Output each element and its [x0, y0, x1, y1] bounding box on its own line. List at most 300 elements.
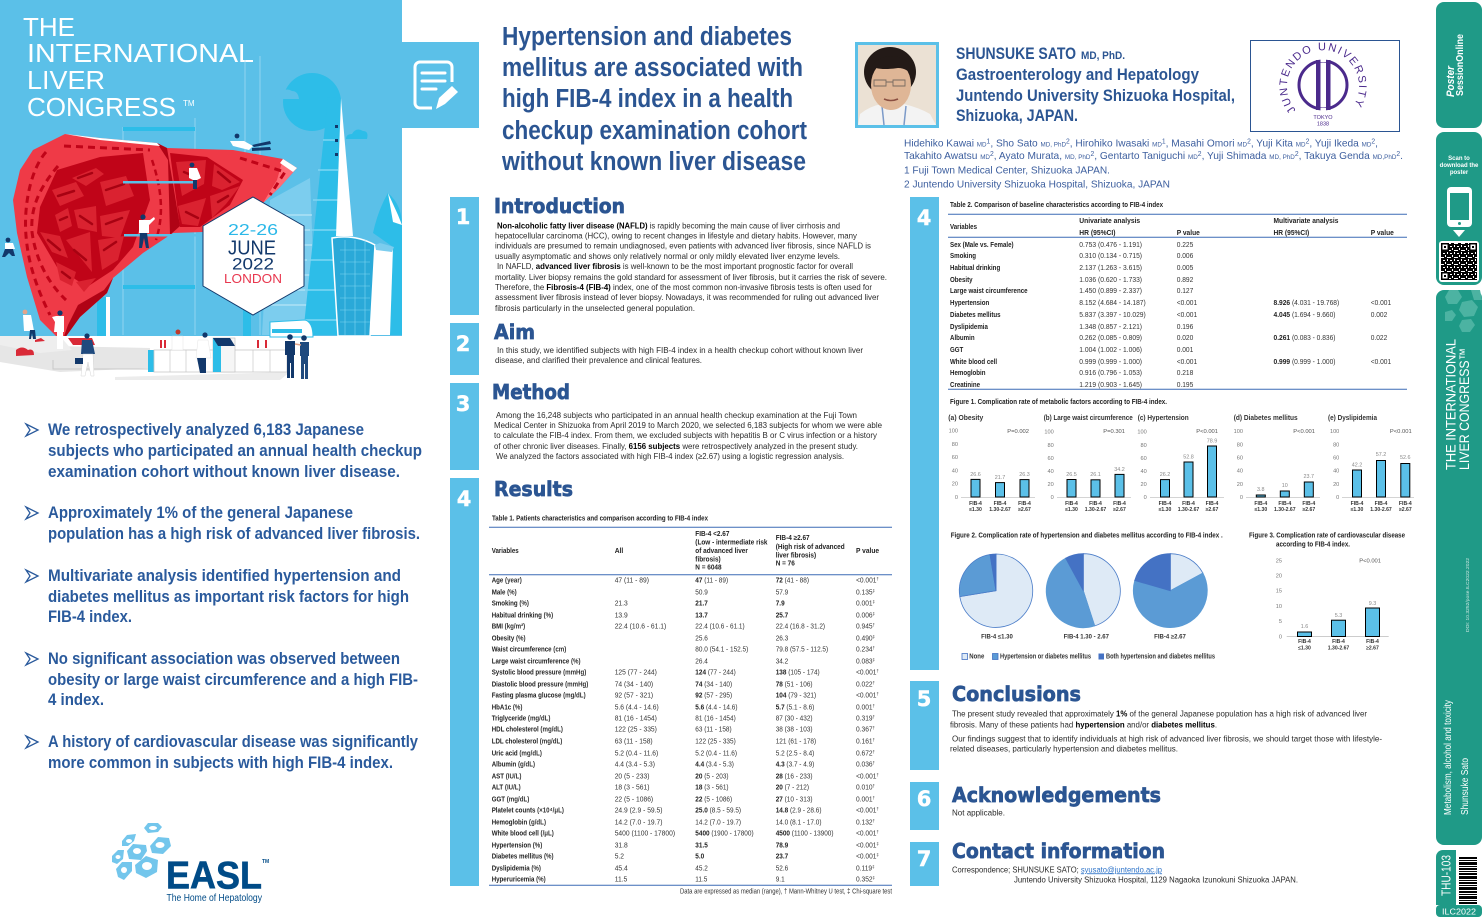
presenter photo — [855, 42, 939, 128]
pie chart: FIB-4 1.30 to 2.67: FIB-4 1.30 - 2.67 — [1064, 634, 1110, 640]
chart: (d) diabetes mellitus: (d) Diabetes mellitus — [1234, 415, 1298, 422]
table 1 column: low to intermediate risk: 25.6 — [695, 635, 708, 642]
chart: (b) large waist circumference: (b) Large waist circumference — [1044, 415, 1133, 422]
table 1 column: high risk: 20 (7 - 212) — [776, 784, 809, 791]
authors and affiliations: MD — [1362, 142, 1372, 148]
two standing scientists — [285, 334, 309, 379]
EASL logo: The Home of Hepatology — [166, 893, 262, 904]
congress title: THE — [23, 12, 75, 42]
table 1 column: variables: Diabetes mellitus (%) — [492, 853, 554, 860]
key point 1: We retrospectively analyzed 6,183 Japanese — [48, 420, 364, 439]
table 1 column: variables: AST (IU/L) — [492, 773, 521, 780]
table 2 column: variables: Hypertension — [950, 300, 989, 307]
table 1 column: low to intermediate risk: 5400 (1900 - 17800) — [695, 830, 754, 837]
key point 4: 4 index. — [48, 690, 104, 709]
lab bench — [53, 338, 287, 372]
table 1 column: all: 45.4 — [615, 865, 628, 872]
panel: conclusions: Conclusions — [952, 682, 1081, 706]
chart: (b) large waist circumference — [1044, 415, 1133, 513]
chart: (d) diabetes mellitus: 10 — [1282, 483, 1288, 489]
table 1 column: high risk: 78 (51 - 106) — [776, 681, 813, 688]
table 1 column: low to intermediate risk: N = 6048 — [695, 564, 722, 572]
table 1 column: variables: Systolic blood pressure (mmHg) — [492, 669, 586, 676]
chart: (a) obesity: P=0.002 — [1007, 429, 1029, 435]
table 1 column: high risk: 27 (10 - 313) — [776, 796, 813, 803]
chart: (e) dyslipidemia: 40 — [1333, 469, 1339, 475]
table 1 column: low to intermediate risk: 45.2 — [695, 865, 708, 872]
key point 2: Approximately 1% of the general Japanese — [48, 503, 353, 522]
chart: (c) hypertension: P<0.001 — [1196, 429, 1218, 435]
chart: (d) diabetes mellitus: 23.7 — [1304, 474, 1314, 480]
table 1 column: high risk: 14.8 (2.9 - 28.6) — [776, 807, 821, 814]
table 1 column: variables: Large waist circumference (%) — [492, 658, 581, 665]
chart: (a) obesity: ≥2.67 — [1018, 507, 1031, 513]
table 1 column: p value: <0.001 — [856, 577, 876, 584]
table 1 column: high risk: 4500 (1100 - 13900) — [776, 830, 834, 837]
authors and affiliations: , Masahi Omori — [1166, 138, 1237, 150]
table 1 column: p value: 0.135 — [856, 589, 873, 596]
chart: (e) dyslipidemia: FIB-4 — [1351, 501, 1364, 507]
table 1 column: p value: 0.319 — [856, 715, 873, 722]
chart: (d) diabetes mellitus: FIB-4 — [1254, 501, 1267, 507]
table 1 column: p value: 0.367 — [856, 726, 873, 734]
chart: (e) dyslipidemia: 80 — [1333, 442, 1339, 448]
table 1 column: all: 5400 (1100 - 17800) — [615, 830, 675, 837]
congress title: CONGRESS — [27, 92, 176, 122]
authors and affiliations: MD, PhD — [1065, 154, 1091, 161]
table 1 column: variables: Hypertension (%) — [492, 842, 542, 849]
table 1 column: variables: GGT (mg/dL) — [492, 796, 529, 803]
table 1 column: p value: 0.945 — [856, 623, 873, 630]
table 1 column: p value: P value — [856, 548, 879, 555]
table 1 column: high risk: 7.9 — [776, 600, 785, 607]
pie chart: FIB-4 up to 1.30: FIB-4 ≤1.30 — [981, 634, 1013, 640]
sidebar: scan to download: download the — [1440, 163, 1479, 169]
chart: (d) diabetes mellitus: 80 — [1237, 442, 1243, 448]
chart: (e) dyslipidemia: ≥2.67 — [1399, 507, 1412, 513]
chart: (c) hypertension: (c) Hypertension — [1138, 415, 1189, 422]
table 1 column: all: 20 (5 - 233) — [615, 773, 649, 780]
panel: introduction: Therefore, the Fibrosis-4 (FIB-4) index, one of the most common non-invasive fibrosis tests is often used for — [495, 282, 872, 292]
authors and affiliations: Takahito Awatsu MD — [904, 150, 990, 162]
key point 4: obesity or large waist circumference and a high FIB- — [48, 670, 418, 689]
chart: (a) obesity: 40 — [952, 468, 958, 474]
key point 3: diabetes mellitus as important risk factors for high — [48, 587, 409, 606]
table 2 column: univariate p value: 0.006 — [1177, 253, 1194, 260]
authors and affiliations: MD — [1152, 142, 1162, 148]
table 1 column: all: 22 (5 - 1086) — [615, 796, 653, 803]
university logo — [1250, 40, 1400, 132]
chart: (c) hypertension: 78.9 — [1207, 438, 1217, 444]
chart: cardiovascular disease: 1.30-2.67 — [1328, 646, 1349, 652]
table 1 title: Table 1. Patients characteristics and comparison according to FIB-4 index — [492, 516, 708, 522]
table 2 column: univariate hazard ratio: 0.310 (0.134 - 0.715) — [1079, 253, 1142, 260]
table 2 column: variables — [950, 224, 1028, 389]
table 2 column: univariate p value: 0.005 — [1177, 265, 1194, 272]
table 1 column: high risk: 26.3 — [776, 635, 788, 642]
barcode — [1459, 857, 1477, 904]
table 2 column: variables: GGT — [950, 347, 963, 354]
chart: (b) large waist circumference: 100 — [1044, 430, 1054, 436]
table 1 column: p value — [856, 548, 879, 883]
table 1 column: variables: Diastolic blood pressure (mmHg) — [492, 681, 588, 688]
chart: (a) obesity: 20 — [952, 482, 958, 488]
table 1 footnote: Data are expressed as median (range), † Mann-Whitney U test, ‡ Chi-square test — [680, 888, 892, 896]
hexagon date badge — [203, 197, 304, 315]
panel: method: 3 — [456, 392, 470, 416]
table 1 column: variables: Habitual drinking (%) — [492, 612, 553, 619]
main title: Hypertension and diabetes — [502, 23, 792, 51]
table 1 column: low to intermediate risk: (Low - intermediate risk — [695, 539, 768, 547]
table 1 column: p value: † — [873, 795, 876, 800]
DOI: DOI: 10.3252/pose.ILC2022.2022 — [1465, 558, 1470, 632]
table 1 column: p value: 0.001 — [856, 600, 873, 607]
table 1 column: high risk: 5.2 (2.5 - 8.4) — [776, 750, 814, 757]
table 1 column: p value: 0.001 — [856, 704, 873, 711]
table 1 column: variables: ALT (IU/L) — [492, 784, 521, 791]
table 1 column: all: 5.2 (0.4 - 11.6) — [615, 750, 658, 757]
authors and affiliations: MD — [1188, 154, 1198, 161]
table 1 column: high risk: 79.8 (57.5 - 112.5) — [776, 646, 828, 653]
table 1 column: p value: † — [876, 668, 879, 673]
chart: (a) obesity: ≤1.30 — [969, 507, 982, 513]
chart: (c) hypertension: 80 — [1140, 443, 1147, 449]
table 1 column: low to intermediate risk: fibrosis) — [695, 556, 721, 564]
authors and affiliations: , Yuji Kita — [1251, 138, 1296, 150]
table 1 column: high risk: 38 (38 - 103) — [776, 726, 813, 734]
table 2 column: univariate hazard ratio: 0.916 (0.796 - 1.053) — [1079, 370, 1142, 377]
table 1 column: low to intermediate risk: 81 (16 - 1454) — [695, 715, 736, 722]
panel: congress banner illustration — [0, 0, 402, 382]
table 2 column: multivariate hazard ratio: 8.926 (4.031 - 19.768) — [1274, 300, 1339, 307]
chart: (b) large waist circumference: FIB-4 — [1113, 501, 1126, 507]
table 2 column: variables: Sex (Male vs. Female) — [950, 242, 1014, 249]
chart: (a) obesity: 0 — [955, 495, 958, 501]
chart: (a) obesity: 1.30-2.67 — [989, 507, 1011, 513]
panel: introduction: fibrosis particularly in the unselected general population. — [495, 303, 695, 313]
chart: (d) diabetes mellitus: ≥2.67 — [1302, 507, 1315, 513]
pie chart: FIB-4 up to 1.30 — [959, 554, 1033, 640]
congress title — [23, 12, 254, 122]
table 1 column: high risk: FIB-4 ≥2.67 — [776, 535, 810, 542]
table 1 column: variables: LDL cholesterol (mg/dL) — [492, 738, 562, 745]
panel: conclusions: related diseases, particularly hypertension and diabetes mellitus. — [950, 743, 1178, 753]
panel: acknowledgements — [910, 782, 1161, 830]
chart: (c) hypertension: FIB-4 — [1206, 501, 1219, 507]
key point 4: No significant association was observed between — [48, 649, 400, 668]
figure 2 title: Figure 2. Complication rate of hypertension and diabetes mellitus according to FIB-4 index . — [951, 532, 1223, 540]
panel: results: Results — [494, 477, 573, 501]
table 1 column: low to intermediate risk: 124 (77 - 244) — [695, 669, 736, 676]
chart: (e) dyslipidemia: 1.30-2.67 — [1370, 507, 1392, 513]
figure on platform — [139, 214, 155, 248]
table 1 column: p value: <0.001 — [856, 692, 876, 699]
panel: introduction: In NAFLD, advanced liver fibrosis is well-known to be the most important prognostic factor for overall — [497, 261, 853, 271]
table 1 column: high risk: 14.0 (8.1 - 17.0) — [776, 819, 821, 826]
table 1 column: p value: 0.001 — [856, 796, 873, 803]
chart: cardiovascular disease: 1.6 — [1301, 624, 1308, 630]
chart: (e) dyslipidemia: 42.2 — [1352, 462, 1362, 468]
table 1 column: all: 122 (25 - 335) — [615, 726, 657, 734]
table 1 column: variables: BMI (kg/m²) — [492, 623, 525, 630]
table 1 column: variables: Fasting plasma glucose (mg/dL) — [492, 692, 586, 699]
chart: (d) diabetes mellitus: ≤1.30 — [1254, 507, 1267, 513]
table 1 column: p value: 0.234 — [856, 646, 873, 653]
table 1 column: p value: † — [873, 749, 876, 754]
panel: contact information: Contact information — [952, 839, 1165, 863]
table 1 column: high risk: 34.2 — [776, 658, 788, 665]
university logo: TOKYO — [1313, 115, 1333, 121]
figure on right lobe — [189, 163, 201, 189]
table 1 column: all: 24.9 (2.9 - 59.5) — [615, 807, 663, 814]
panel: method — [450, 380, 882, 470]
panel: method: Medical Center in Shizuoka from April 2019 to March 2020, we selected 6,183 subjects for whom we were able — [494, 420, 882, 430]
panel: results continued — [910, 197, 1414, 670]
chart: (d) diabetes mellitus: 60 — [1237, 456, 1243, 462]
table 2 column: variables: Smoking — [950, 253, 976, 260]
chart: (d) diabetes mellitus: FIB-4 — [1302, 501, 1315, 507]
table 1 column: p value: † — [873, 783, 876, 788]
table 2 column: univariate p value: 0.195 — [1177, 382, 1194, 389]
table 1 column: low to intermediate risk: 122 (25 - 335) — [695, 738, 736, 745]
panel: aim: Aim — [494, 320, 535, 344]
table 2 column: univariate p value: <0.001 — [1177, 312, 1197, 319]
chart: (e) dyslipidemia: ≤1.30 — [1351, 507, 1364, 513]
liver — [13, 134, 297, 342]
table 1 column: p value: 0.083 — [856, 658, 873, 665]
key point 4 — [26, 649, 418, 709]
chart: (c) hypertension — [1137, 415, 1224, 513]
chart: cardiovascular disease: 0 — [1279, 634, 1282, 640]
chart: (a) obesity: (a) Obesity — [948, 415, 983, 422]
table 1 column: p value: ‡ — [873, 588, 876, 593]
table 1 column: low to intermediate risk: 14.2 (7.0 - 19.7) — [695, 819, 741, 826]
chart: (a) obesity: 26.3 — [1019, 472, 1030, 478]
table 2 column: univariate hazard ratio — [1079, 218, 1146, 389]
pie chart: FIB-4 at least 2.67 — [1133, 554, 1207, 640]
table 1 column: all: 18 (3 - 561) — [615, 784, 649, 791]
authors and affiliations: 2 — [1066, 138, 1070, 146]
EASL logo: EASL — [166, 854, 262, 898]
author name: Shunsuke Sato — [1460, 758, 1471, 815]
table 2 column: multivariate p value: P value — [1371, 230, 1394, 237]
chart: (d) diabetes mellitus — [1234, 415, 1320, 513]
chart: (b) large waist circumference: 0 — [1051, 495, 1054, 501]
presenter details — [956, 45, 1235, 125]
table 1 column: all: 63 (11 - 158) — [615, 738, 653, 745]
key point 3: FIB-4 index. — [48, 607, 132, 626]
table 1 column: variables: Hyperuricemia (%) — [492, 876, 546, 883]
EASL logo: TM — [262, 859, 269, 865]
table 1 column: p value: 0.672 — [856, 750, 873, 757]
chart: (c) hypertension: 60 — [1140, 456, 1147, 462]
table 1 — [489, 527, 892, 885]
table 2 column: univariate hazard ratio: 1.348 (0.857 - 2.121) — [1079, 324, 1142, 331]
table 2 column: variables: Hemoglobin — [950, 370, 986, 377]
table 1 column: high risk: 57.9 — [776, 589, 788, 596]
chart: (c) hypertension: 20 — [1140, 482, 1147, 488]
table 1 column: all: 11.5 — [615, 876, 627, 883]
chart: (e) dyslipidemia: (e) Dyslipidemia — [1328, 415, 1377, 422]
chart: (d) diabetes mellitus: FIB-4 — [1278, 501, 1291, 507]
chart: cardiovascular disease: 25 — [1276, 558, 1282, 564]
main title: checkup examination cohort — [502, 117, 807, 145]
table 1 column: variables: Dyslipidemia (%) — [492, 865, 541, 872]
hexagon date badge: 2022 — [232, 254, 274, 274]
table 1 column: low to intermediate risk: 20 (5 - 203) — [695, 773, 729, 780]
chart: (b) large waist circumference: 26.5 — [1066, 472, 1077, 478]
table 1 column: p value: <0.001 — [856, 830, 876, 837]
chart: cardiovascular disease: 10 — [1276, 604, 1282, 610]
chart: cardiovascular disease — [1276, 558, 1389, 652]
panel: conclusions — [910, 681, 1382, 770]
panel: results — [450, 477, 892, 896]
table 1 column: low to intermediate risk: 92 (57 - 295) — [695, 692, 732, 699]
chart: (b) large waist circumference: FIB-4 — [1065, 501, 1078, 507]
chart: cardiovascular disease: 5.3 — [1335, 613, 1342, 619]
table 1 column: all — [615, 548, 675, 883]
panel: contact information — [910, 839, 1298, 886]
chart: (c) hypertension: 26.2 — [1160, 472, 1170, 478]
table 1 column: p value: 0.036 — [856, 761, 873, 768]
congress title: LIVER — [27, 65, 105, 95]
table 1 column: all: 31.8 — [615, 842, 628, 849]
table 1 column: p value: <0.001 — [856, 853, 876, 860]
table 1 column: p value: 0.010 — [856, 784, 873, 791]
panel: acknowledgements: 6 — [917, 787, 931, 811]
key point 3: Multivariate analysis identified hypertension and — [48, 566, 401, 585]
table 1 column: variables: Male (%) — [492, 589, 517, 596]
table 1 column: low to intermediate risk: 74 (34 - 140) — [695, 681, 732, 688]
table 1 column: high risk: 52.6 — [776, 865, 788, 872]
chart: (a) obesity: 21.7 — [995, 475, 1005, 481]
table 1 column: all: 21.3 — [615, 600, 628, 607]
skyline buildings — [262, 97, 402, 336]
panel: aim — [450, 320, 863, 375]
authors and affiliations: 1 — [987, 138, 990, 146]
table 1 column: high risk — [776, 535, 845, 883]
table 2 column: variables: Albumin — [950, 335, 975, 342]
chart: (a) obesity: FIB-4 — [969, 501, 982, 507]
bus — [270, 320, 313, 337]
authors and affiliations: 2 — [1090, 151, 1094, 158]
scientists — [2, 134, 309, 379]
congress name vertical: LIVER CONGRESS™ — [1456, 348, 1472, 470]
table 2 column: univariate hazard ratio: 0.262 (0.085 - 0.809) — [1079, 335, 1142, 342]
table 1 column: variables: HDL cholesterol (mg/dL) — [492, 726, 563, 734]
table 1 column: p value: 0.490 — [856, 635, 873, 642]
table 1 column: p value: ‡ — [873, 599, 876, 604]
panel: method: of other chronic liver diseases. Finally, 6156 subjects were retrospectively analyzed in the present study. — [494, 441, 858, 451]
table 2 column: univariate p value: 0.218 — [1177, 370, 1194, 377]
authors and affiliations: . — [1400, 150, 1403, 162]
panel: aim: 2 — [456, 332, 470, 356]
authors and affiliations: MD — [1296, 142, 1306, 148]
table 2 column: univariate p value: 0.127 — [1177, 288, 1194, 295]
hexagon date badge: 22-26 — [228, 222, 278, 239]
table 1 column: p value: 0.022 — [856, 681, 873, 688]
chart: (a) obesity: 80 — [952, 442, 958, 448]
table 1 column: high risk: 28 (16 - 233) — [776, 773, 813, 780]
panel: contact information: Correspondence; SHUNSUKE SATO; syusato@juntendo.ac.jp — [952, 864, 1162, 874]
table 1 column: all: All — [615, 548, 623, 555]
table 2 column: univariate p value — [1177, 230, 1200, 389]
table 1 column: low to intermediate risk: FIB-4 <2.67 — [695, 531, 730, 538]
sidebar: poster session online: SessionOnline — [1455, 34, 1466, 96]
table 1 column: low to intermediate risk: 5.0 — [695, 853, 704, 860]
table 1 column: p value: ‡ — [873, 875, 876, 880]
university logo: JUNTENDO UNIVERSITY — [1279, 42, 1367, 113]
table 1 column: variables: Obesity (%) — [492, 635, 526, 642]
platforms — [123, 181, 197, 236]
table 1 column: variables: Waist circumference (cm) — [492, 646, 566, 653]
table 1 column: p value: ‡ — [873, 611, 876, 616]
authors and affiliations: MD — [1237, 142, 1247, 148]
table 2 column: multivariate hazard ratio: 0.999 (0.999 - 1.000) — [1274, 359, 1336, 366]
table 2 column: univariate hazard ratio: 1.004 (1.002 - 1.006) — [1079, 347, 1142, 354]
chart: (a) obesity: 26.6 — [970, 472, 981, 478]
sidebar: poster session online: Poster — [1445, 65, 1457, 97]
table 1 column: all: 13.9 — [615, 612, 628, 619]
walker — [75, 333, 95, 376]
figure 1 title: Figure 1. Complication rate of metabolic factors according to FIB-4 index. — [950, 399, 1167, 406]
figure lying on liver — [230, 134, 271, 151]
sidebar: poster session online — [1436, 2, 1482, 128]
chart: (b) large waist circumference: 26.1 — [1090, 472, 1101, 478]
table 1 column: p value: 0.161 — [856, 738, 873, 745]
authors and affiliations: 1 Fuji Town Medical Center, Shizuoka JAPAN. — [904, 164, 1110, 176]
table 1 column: low to intermediate risk: 80.0 (54.1 - 152.5) — [695, 646, 748, 653]
pie legend: Both hypertension and diabetes mellitus — [1106, 654, 1215, 661]
main title: without known liver disease — [501, 148, 806, 176]
table 1 column: all: 81 (16 - 1454) — [615, 715, 657, 722]
table 1 column: p value: 0.352 — [856, 876, 873, 883]
key point 2: population has a high risk of advanced liver fibrosis. — [48, 524, 420, 543]
chart: (e) dyslipidemia: P<0.001 — [1390, 429, 1412, 435]
scaffold lines — [123, 56, 260, 335]
chart: cardiovascular disease: ≤1.30 — [1298, 646, 1311, 652]
panel: method: Method — [492, 380, 570, 404]
table 1 column: p value: 0.132 — [856, 819, 873, 826]
table 1 column: variables: White blood cell (/μL) — [492, 830, 554, 837]
table 1 column: high risk: 104 (79 - 321) — [776, 692, 816, 699]
chart: (e) dyslipidemia: 60 — [1333, 456, 1339, 462]
chart: (d) diabetes mellitus: 3.8 — [1257, 487, 1265, 493]
table 1 column: variables: Hemoglobin (g/dL) — [492, 819, 546, 826]
table 1 column: p value: † — [873, 818, 876, 823]
table 2 column: univariate p value: <0.001 — [1177, 300, 1197, 307]
chart: (b) large waist circumference: FIB-4 — [1089, 501, 1102, 507]
authors and affiliations — [904, 138, 1403, 190]
authors and affiliations: MD,PhD — [1373, 154, 1397, 161]
table 1 column: low to intermediate risk: 50.9 — [695, 589, 708, 596]
seated scientist — [196, 332, 211, 373]
table 2 column: univariate hazard ratio: 1.036 (0.620 - 1.733) — [1079, 277, 1142, 284]
table 1 column: low to intermediate risk: 26.4 — [695, 658, 708, 665]
pie legend: Hypertension or diabetes mellitus — [1000, 654, 1091, 661]
icon tab: document with pencil — [402, 42, 479, 128]
panel: aim: disease, and clarified their prevalence and clinical features. — [495, 355, 702, 365]
chart: (d) diabetes mellitus: 40 — [1237, 469, 1243, 475]
table 2 column: variables: Diabetes mellitus — [950, 312, 1001, 319]
table 2 — [948, 214, 1407, 389]
table 1 column: high risk: 78.9 — [776, 842, 788, 849]
main title — [501, 23, 807, 176]
table 1 column: high risk: (High risk of advanced — [776, 544, 845, 551]
panel: method: Among the 16,248 subjects who participated in an annual health checkup examination at the Fuji Town — [496, 410, 857, 420]
table 1 column: low to intermediate risk: 47 (11 - 89) — [695, 577, 728, 584]
key point 1 — [26, 420, 422, 481]
